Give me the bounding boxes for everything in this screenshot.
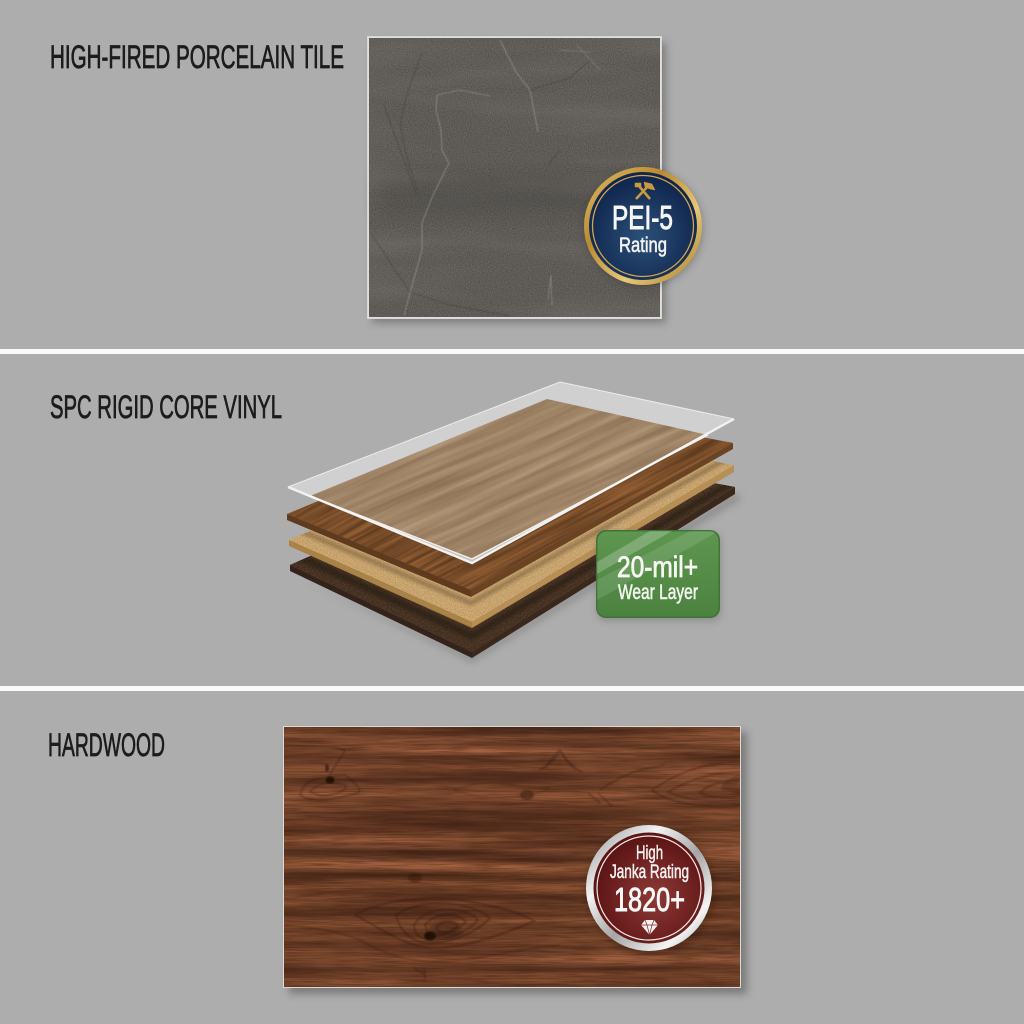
badge value: 1820+: 1820+ [614, 881, 685, 918]
badge: 20-mil+ wear layer [596, 530, 721, 621]
divider between vinyl and hardwood rows [0, 686, 1024, 691]
cathedral grain right [588, 762, 740, 807]
divider between tile and vinyl rows [0, 349, 1024, 354]
tile swatch [368, 36, 666, 323]
panel: hardwood [48, 726, 747, 994]
badge: PEI-5 rating [584, 167, 703, 287]
badge text: High: High [636, 843, 663, 864]
panel: high-fired porcelain tile [50, 36, 703, 323]
layer: tan core [289, 460, 734, 628]
icon: crossed hammers [635, 182, 655, 199]
knot rings top centre [454, 750, 582, 797]
heading: SPC vinyl: SPC RIGID CORE VINYL [50, 389, 282, 425]
badge: high Janka rating [586, 825, 714, 954]
badge value: PEI-5: PEI-5 [612, 199, 673, 236]
badge label: Rating: Rating [619, 234, 667, 257]
heading: porcelain tile: HIGH-FIRED PORCELAIN TILE [50, 39, 344, 75]
icon: diamond [641, 920, 658, 935]
layered plank diagram [287, 382, 741, 664]
layer: brown decor [287, 438, 733, 597]
panel: SPC rigid core vinyl [50, 382, 741, 664]
badge label: Wear Layer: Wear Layer [618, 581, 698, 604]
layer: dark backing [290, 482, 735, 658]
knot rings upper left [284, 745, 359, 800]
badge value: 20-mil+: 20-mil+ [617, 551, 698, 584]
badge text: Janka Rating: Janka Rating [610, 862, 689, 883]
layer: transparent wear layer with veneer [288, 382, 734, 564]
walnut swatch [283, 726, 747, 994]
heading: hardwood: HARDWOOD [48, 727, 165, 763]
large knot lower left [284, 887, 600, 962]
